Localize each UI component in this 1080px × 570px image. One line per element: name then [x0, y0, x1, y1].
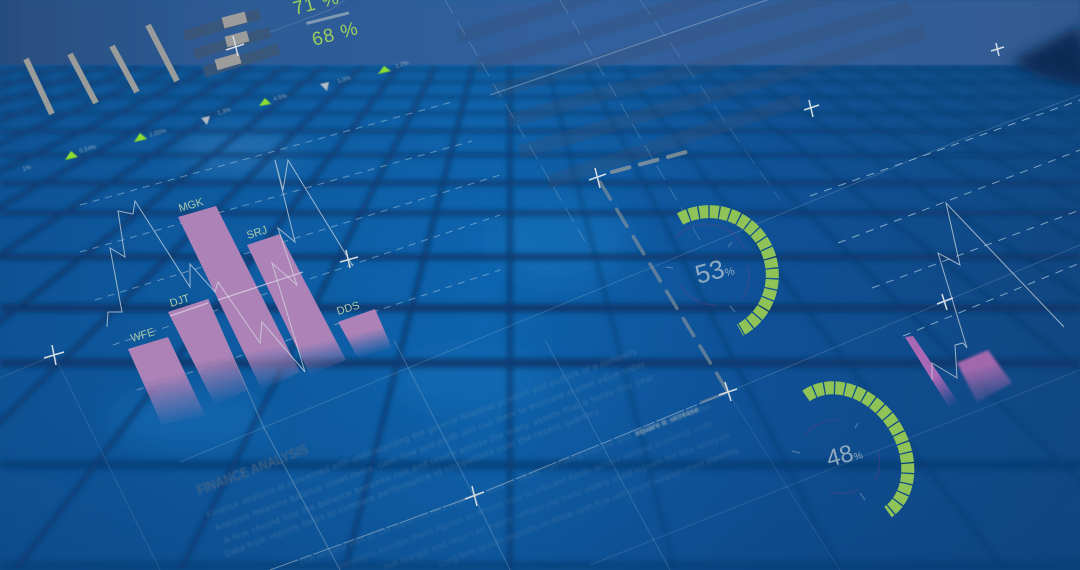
ticker down markers — [201, 82, 329, 125]
thick gray dashed axes — [600, 151, 728, 402]
percent stat: 68%: 68 % — [310, 18, 361, 51]
text column captions: ucrease — [668, 404, 700, 424]
gauge arc — [680, 212, 772, 330]
text paragraph lower: Investors monitor these figures to decide how to allocate funds across several business units — [337, 418, 715, 570]
bar: WFE — [128, 337, 205, 425]
mini line chart — [932, 203, 1064, 380]
text column captions — [633, 404, 700, 438]
ticker values: 0.24% — [79, 144, 98, 155]
bar: DJT — [168, 299, 248, 405]
text paragraph upper: A firm should find the balance between risk and return across the many assets that it holds this year — [222, 372, 655, 546]
bright cross-hair axis line — [270, 392, 728, 570]
gauge faint inner ring — [675, 224, 749, 305]
ticker values: 1.05% — [149, 128, 168, 139]
small stat caption — [306, 11, 349, 25]
label: MGK: MGK — [177, 196, 205, 215]
text paragraph upper: Data from reports helps to compare performance of competitors over the recent quarters — [223, 406, 601, 559]
gauge value: 53% — [692, 251, 737, 290]
text heading: FINANCE ANALYSIS — [194, 441, 310, 498]
gauge ticks — [792, 423, 865, 500]
gauge faint inner ring — [805, 420, 880, 494]
gauge value: 48% — [824, 437, 865, 473]
text column captions: square it — [633, 417, 668, 438]
text block: finance analysis — [194, 346, 739, 570]
gray column bars top left — [26, 25, 177, 114]
top panel: lighter upper band — [0, 0, 1080, 65]
gauge: 53 percent — [666, 212, 772, 330]
bar: DDS — [338, 309, 392, 358]
mini bar wide — [957, 350, 1012, 402]
mini bar narrow — [905, 336, 960, 412]
slider bars top — [184, 14, 279, 72]
slider track — [184, 14, 279, 72]
dashed grid lines left — [80, 102, 500, 390]
gauge ticks — [666, 242, 735, 312]
slider fill — [216, 17, 248, 65]
dark building corner — [1010, 26, 1080, 90]
text paragraph upper: Finance analysis is concerned with understanding the general financial position and outlook of a company — [205, 346, 639, 520]
text paragraph lower: The second part of the report covers revenue, cost of sales, operating income and other market items — [297, 401, 712, 568]
gauge: 48 percent — [792, 388, 908, 512]
ticker values: 1.0% — [337, 75, 352, 85]
label: DDS: DDS — [335, 300, 361, 318]
bar: MGK — [178, 206, 300, 390]
ticker values: 1.2% — [395, 60, 410, 70]
cross markers — [44, 36, 1004, 506]
ticker markers — [65, 66, 391, 160]
gauge arc — [806, 388, 908, 512]
text paragraph upper: Analysts measure balance sheet items, cash flow and profit and use them to estimate market value today — [213, 359, 647, 533]
pale bar highlights — [170, 272, 303, 316]
translucent horizontal bar panel — [458, 0, 925, 182]
ticker values: 1.3% — [217, 107, 232, 117]
line chart: left zigzag — [107, 160, 353, 372]
label: WFE: WFE — [129, 326, 156, 345]
mini chart right — [905, 203, 1064, 412]
ticker strip — [22, 60, 410, 173]
label: DJT: DJT — [168, 292, 191, 310]
column chart: five tickers — [128, 196, 392, 425]
label: SRJ: SRJ — [245, 224, 269, 242]
text paragraph lower: Long term growth depends on stable cash flow and sound balance sheet planning — [437, 445, 739, 569]
ticker values — [22, 60, 410, 173]
bar: SRJ — [247, 234, 346, 375]
dashed grid lines right — [810, 100, 1080, 336]
text paragraph lower: Net margin and return on equity remain the most widely used signals for this analysis — [382, 430, 732, 570]
ticker values: 4.5% — [273, 93, 288, 103]
ticker values: 1% — [22, 165, 33, 173]
